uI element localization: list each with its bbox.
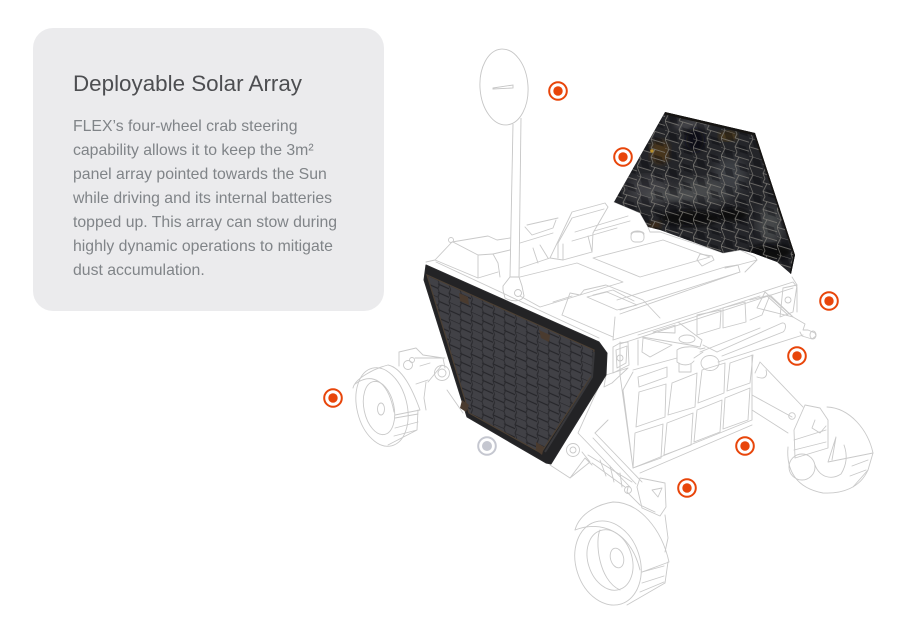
rover: rear right wheel bbox=[752, 362, 873, 493]
marker: orange hotspot bbox=[549, 82, 567, 100]
heading: Deployable Solar Array bbox=[73, 71, 302, 96]
marker: orange hotspot bbox=[736, 437, 754, 455]
marker: orange hotspot bbox=[614, 148, 632, 166]
rover: deck and chassis outline bbox=[426, 202, 816, 473]
text block: description: dust accumulation. bbox=[73, 262, 205, 279]
panel: description card bbox=[33, 28, 384, 311]
rover: lower hinge and bracket bbox=[550, 444, 592, 478]
marker: orange hotspot bbox=[678, 479, 696, 497]
solar array: front stowed panel bbox=[424, 265, 607, 464]
text block: description: topped up. This array can stow during bbox=[73, 214, 337, 231]
text block: description: FLEX’s four-wheel crab steering bbox=[73, 118, 297, 135]
marker: active grey hotspot bbox=[478, 437, 496, 455]
panel mounting tabs bbox=[459, 293, 550, 455]
rover: mast and dish antenna bbox=[477, 47, 531, 301]
text block: description bbox=[73, 118, 337, 279]
text block: description: while driving and its internal batteries bbox=[73, 190, 332, 207]
illustration: lunar rover with solar arrays bbox=[323, 48, 874, 606]
solar array: raised rear panel bbox=[614, 112, 795, 274]
rover: left wheel and suspension bbox=[348, 348, 463, 452]
marker: orange hotspot bbox=[324, 389, 342, 407]
marker: orange hotspot bbox=[820, 292, 838, 310]
text block: description: panel array pointed towards the Sun bbox=[73, 166, 327, 183]
text block: description: highly dynamic operations to mitigate bbox=[73, 238, 333, 255]
hotspot markers bbox=[324, 82, 838, 497]
rover: side equipment panels bbox=[633, 355, 753, 468]
rover: front right wheel and suspension bbox=[564, 375, 669, 614]
marker: orange hotspot bbox=[788, 347, 806, 365]
text block: description: capability allows it to keep the 3m² bbox=[73, 142, 314, 159]
